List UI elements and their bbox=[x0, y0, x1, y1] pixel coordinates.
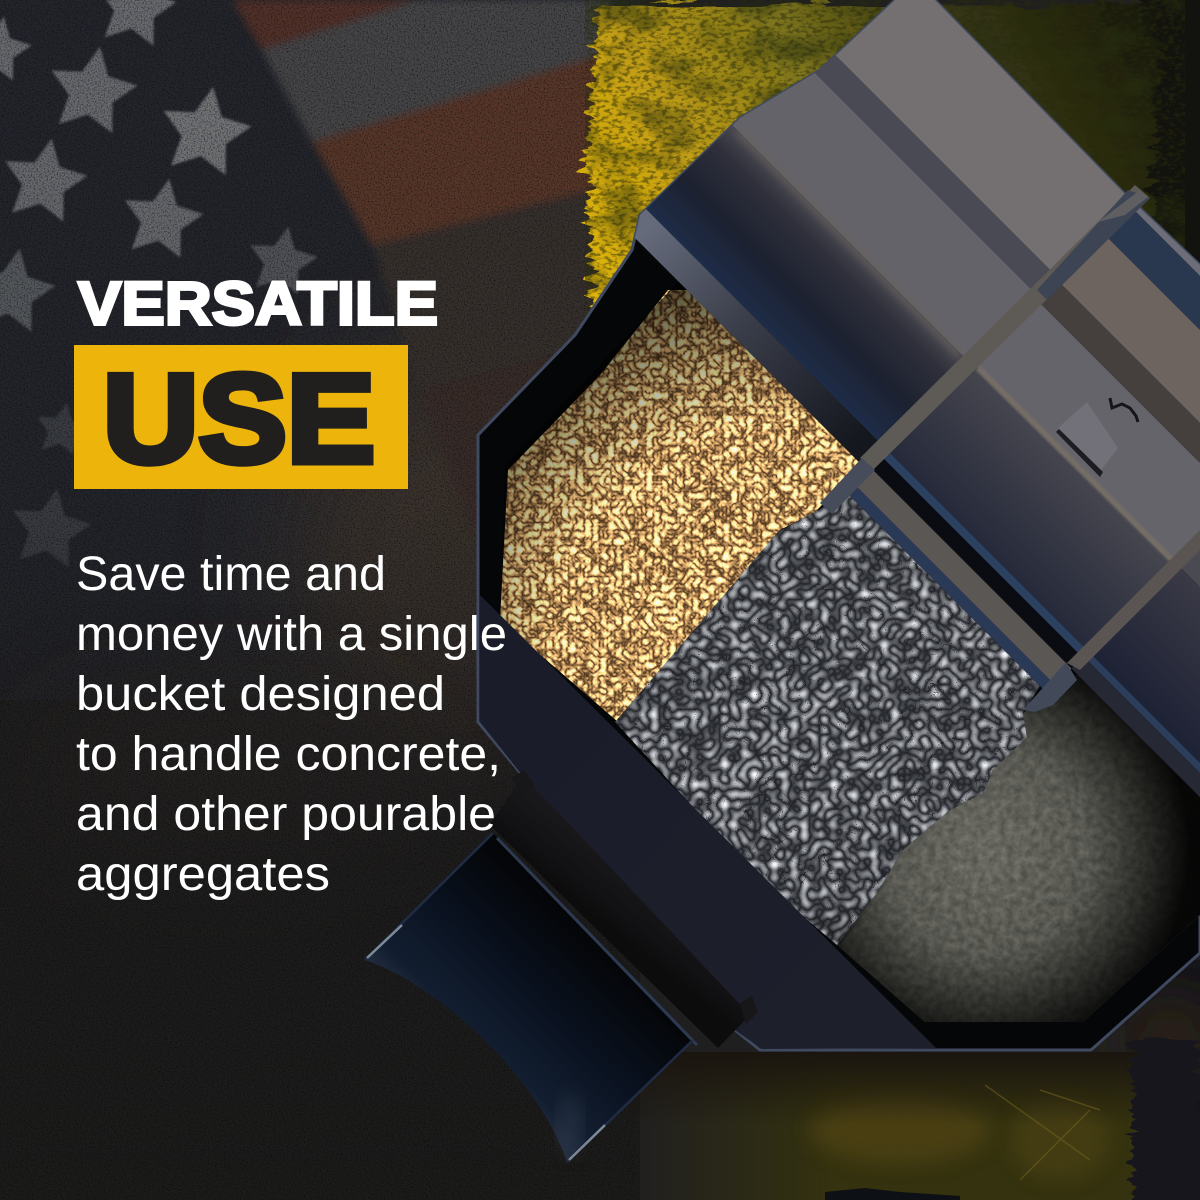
zone above upper crossbar bbox=[635, 0, 1125, 462]
bucket outer shell bbox=[478, 0, 1200, 1050]
crossbar lower bbox=[1023, 530, 1200, 712]
body text: bucket designed bbox=[76, 668, 445, 721]
right tube blue bbox=[1109, 212, 1200, 330]
navy wall panel bbox=[646, 126, 962, 440]
body text: money with a single bbox=[76, 608, 507, 661]
lower right navy panel bbox=[1094, 568, 1200, 763]
ridge line bbox=[737, 130, 960, 355]
discharge chute bbox=[365, 833, 697, 1162]
wood chips bbox=[500, 290, 862, 722]
bucket bbox=[365, 0, 1200, 1162]
materials in bucket bbox=[500, 280, 1200, 1022]
grey sticker panel bbox=[978, 304, 1200, 558]
lower right strip bbox=[1000, 573, 1200, 997]
sticker and mark bbox=[1056, 398, 1138, 477]
zone below lower crossbar bbox=[1072, 550, 1200, 796]
interior shadow bbox=[500, 280, 1040, 945]
body text: and other pourable bbox=[76, 788, 496, 841]
body text: Save time and bbox=[76, 548, 386, 601]
upper light grey panel bbox=[732, 73, 1030, 356]
dark lower panel bbox=[890, 368, 1170, 646]
black strip bbox=[874, 459, 1078, 668]
heading badge: use: USE bbox=[103, 348, 375, 489]
flag fade bbox=[0, 0, 640, 1200]
navy tube strip bbox=[850, 488, 1050, 688]
gate handle bar bbox=[490, 770, 758, 1048]
wall strip bbox=[635, 209, 878, 462]
dark tan strip bbox=[1042, 285, 1200, 463]
back dark strip bbox=[816, 56, 1050, 288]
body text: to handle concrete, bbox=[76, 728, 501, 781]
american flag bbox=[0, 0, 640, 1200]
flag stars bbox=[0, 0, 322, 570]
ridge line bbox=[978, 368, 1172, 560]
lower right glint bbox=[1088, 656, 1200, 772]
gravel bbox=[615, 493, 1040, 945]
body text bbox=[76, 548, 507, 901]
yellow grunge paint top bbox=[585, 0, 1200, 330]
front lip panel bbox=[480, 595, 936, 1049]
body text: aggregates bbox=[76, 848, 330, 901]
light tube strip bbox=[858, 471, 1072, 680]
lower right grey bbox=[1182, 550, 1200, 586]
flag stripes bbox=[232, 0, 610, 530]
right tube edge bbox=[1136, 208, 1200, 276]
heading: versatile: VERSATILE bbox=[78, 270, 438, 338]
wet concrete bbox=[837, 675, 1200, 1022]
green grunge paint bottom bbox=[630, 960, 1200, 1200]
crossbar upper bbox=[820, 185, 1150, 514]
top light panel bbox=[836, 0, 1125, 270]
tan panel bbox=[1062, 238, 1200, 423]
zone between crossbars bbox=[850, 208, 1200, 688]
top sloped panels bbox=[635, 0, 1200, 796]
blue glint bbox=[884, 453, 1084, 652]
